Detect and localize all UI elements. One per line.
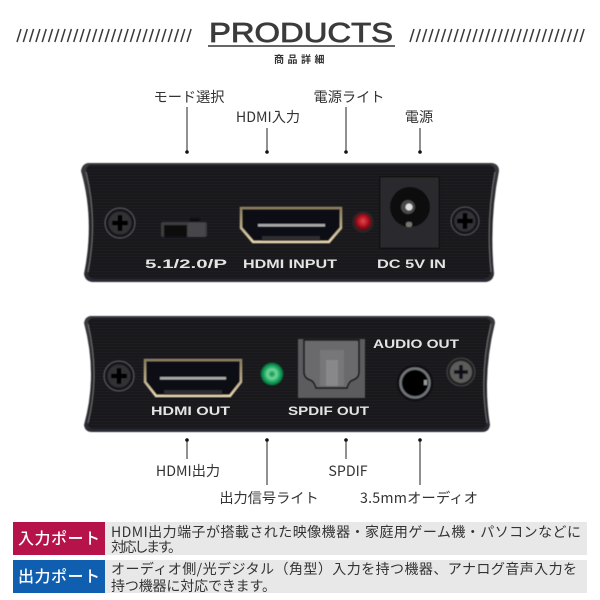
icon: HDMI output port <box>145 360 241 396</box>
icon: right screw <box>451 207 479 235</box>
note text: 持つ機器に対応できます。 <box>111 576 276 596</box>
switch <box>161 218 207 237</box>
tag: output port: 出力ポート <box>18 563 100 587</box>
panel: output port note <box>13 559 587 596</box>
callout: power light <box>314 87 384 154</box>
icon: left screw <box>105 208 135 238</box>
note text <box>111 522 581 557</box>
title <box>17 17 584 66</box>
callout: HDMI output: HDMI出力 <box>156 461 220 481</box>
callout: 3.5mm audio: 3.5mmオーディオ <box>360 488 478 508</box>
icon: DC jack <box>380 177 439 248</box>
icon: green LED <box>260 362 284 386</box>
callout: SPDIF <box>328 438 368 481</box>
heading: PRODUCTS <box>209 17 393 48</box>
device label: HDMI input: HDMI INPUT <box>243 259 337 271</box>
top callouts <box>154 87 433 154</box>
panel: input port note <box>13 522 587 557</box>
bottom callouts <box>156 438 478 508</box>
icon: SPDIF port <box>298 339 365 398</box>
tag: output port <box>13 560 105 593</box>
note text: オーディオ側/光デジタル（角型）入力を持つ機器、アナログ音声入力を <box>111 559 577 579</box>
callout: SPDIF: SPDIF <box>328 461 368 481</box>
note text: 対応します。 <box>111 537 182 557</box>
device label: HDMI out: HDMI OUT <box>151 406 230 418</box>
callout: HDMI input <box>236 107 300 154</box>
panel: input side of device <box>81 163 499 282</box>
callout: HDMI input: HDMI入力 <box>236 107 300 127</box>
callout: power <box>405 107 433 154</box>
icon: audio jack <box>397 365 433 401</box>
callout: power: 電源 <box>405 107 433 127</box>
device body <box>84 316 495 432</box>
callout: power light: 電源ライト <box>314 87 384 107</box>
icon: left screw <box>104 361 134 391</box>
callout: 3.5mm audio <box>360 438 478 508</box>
tag: input port: 入力ポート <box>18 525 100 549</box>
device label: mode: 5.1/2.0/P <box>145 259 228 271</box>
device label: SPDIF out: SPDIF OUT <box>288 406 369 418</box>
device label: DC 5V in: DC 5V IN <box>377 259 446 271</box>
device label: audio out: AUDIO OUT <box>373 339 459 351</box>
callout: mode select: モード選択 <box>154 87 224 107</box>
callout: mode select <box>154 87 224 154</box>
stripes: left <box>17 29 191 42</box>
note text: HDMI出力端子が搭載された映像機器・家庭用ゲーム機・パソコンなどに <box>111 522 581 542</box>
callout: output signal light <box>219 438 319 508</box>
callout: HDMI output <box>156 438 220 481</box>
callout: output signal light: 出力信号ライト <box>219 488 319 508</box>
icon: HDMI input port <box>241 208 341 242</box>
device body <box>81 163 499 282</box>
stripes: right <box>410 29 584 42</box>
heading underline <box>208 45 395 47</box>
panel: output side of device <box>84 316 495 432</box>
tag: input port <box>13 522 105 555</box>
icon: right screw <box>447 358 475 386</box>
subheading: 商品詳細 <box>274 51 328 66</box>
note background <box>13 522 587 555</box>
note background <box>13 560 587 593</box>
note text <box>111 559 577 596</box>
icon: red LED <box>352 211 374 233</box>
